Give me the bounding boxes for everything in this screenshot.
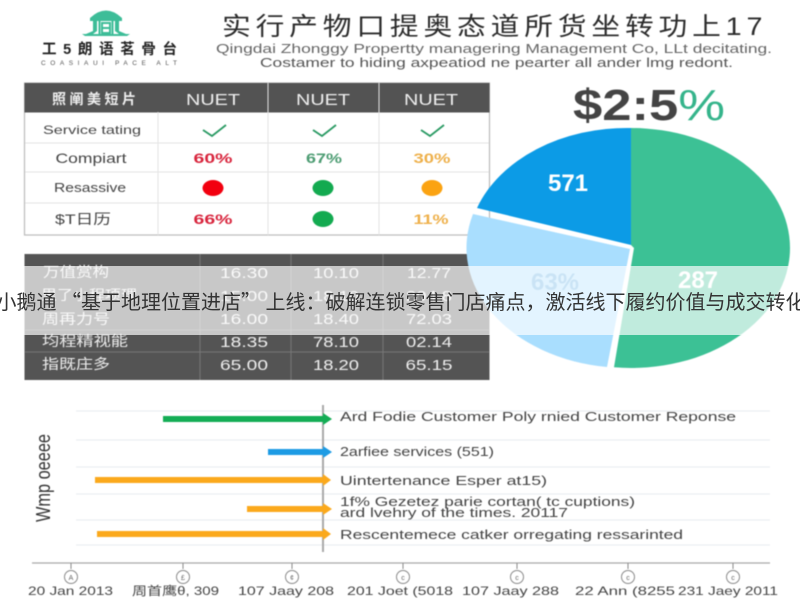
pie title: $2:5 % — [573, 81, 725, 130]
row: service rating — [43, 123, 444, 137]
bar labels: ard lvehry of the times. 20117 — [340, 505, 568, 520]
time axis: c — [731, 575, 735, 582]
row: service rating: Service tating — [43, 123, 141, 137]
table header: NUET — [404, 92, 458, 109]
arrow: amber 1 — [95, 474, 331, 486]
row: cost: $T日历 — [55, 211, 111, 227]
time axis: c — [401, 575, 405, 582]
table: figures: 12.77 — [407, 265, 451, 282]
time axis: 201 Joet (5018 — [347, 584, 453, 598]
table: figures: 里了小程项理 — [41, 287, 137, 303]
row: compliant: 60% — [194, 150, 233, 166]
bar labels: 2arfiee services (551) — [340, 444, 494, 459]
row: response: Resassive — [54, 180, 126, 195]
row: compliant: Compiart — [56, 150, 127, 166]
label: 571: 571 — [548, 170, 588, 197]
time axis: c — [515, 575, 519, 582]
table header: 照阐美短片 — [52, 91, 136, 107]
overlay banner headline: 小鹅通 “基于地理位置进店” 上线：破解连锁零售门店痛点，激活线下履约价值与成交转化 — [0, 286, 800, 315]
bar labels: Ard Fodie Customer Poly rnied Customer Reponse — [340, 409, 736, 424]
table: figures: 78.10 — [313, 334, 359, 351]
icon: building — [82, 10, 130, 36]
table header: NUET — [186, 92, 240, 109]
table: service comparison — [24, 83, 490, 235]
row: cost: 11% — [414, 211, 449, 227]
logo — [41, 10, 177, 67]
table: figures: 均程精视能 — [42, 333, 128, 349]
table header — [24, 83, 490, 112]
time axis: 231 Jaey 2011 — [678, 584, 778, 598]
row: cost: 66% — [194, 211, 233, 227]
table: figures: 18.10 — [313, 288, 359, 305]
timeline chart — [28, 405, 778, 598]
subtitle: Costamer to hiding axpeatiod ne pearter all ander lmg redont. — [260, 56, 733, 70]
row: response — [54, 180, 442, 196]
label: 287: 287 — [678, 267, 718, 294]
arrow: blue — [268, 446, 332, 458]
logo name: 工5朗语茗骨台 — [42, 40, 177, 58]
time axis — [28, 563, 778, 598]
row: compliant — [56, 150, 451, 166]
logo tagline: COASIAUI PACE ALT — [41, 60, 177, 67]
time axis: 22 Ann (8255 — [575, 584, 675, 598]
row: compliant: 67% — [306, 150, 343, 166]
time axis: 20 Jan 2013 — [28, 584, 113, 598]
subtitle: Qingdai Zhonggy Propertty managering Management Co, LLt decitating. — [216, 42, 772, 56]
row: compliant: 30% — [414, 150, 451, 166]
pie chart — [466, 128, 790, 368]
bar labels: Uintertenance Esper at15) — [340, 473, 547, 488]
table: figures: 16.30 — [220, 265, 268, 282]
overlay banner headline — [0, 266, 800, 335]
y axis label: Wmp oeeee — [33, 434, 55, 522]
slice: light blue — [466, 214, 630, 367]
table: figures: 72.03 — [406, 311, 452, 328]
table: figures: 204.8 — [406, 288, 452, 305]
time axis: 107 Jaay 208 — [238, 584, 334, 598]
bar labels: Rescentemece catker orregating ressarinted — [340, 527, 683, 542]
table: figures: 65.15 — [406, 357, 452, 374]
table header: NUET — [296, 92, 350, 109]
title: 实行产物口提奥态道所货坐转功上17 — [222, 13, 762, 41]
table: figures: 10.10 — [313, 265, 359, 282]
table: figures — [24, 254, 490, 380]
arrow: green — [163, 413, 332, 425]
arrow: amber 3 — [97, 528, 331, 540]
table: figures: 指既庄多 — [42, 356, 110, 372]
time axis: £ — [181, 575, 185, 582]
arrow: amber 2 — [247, 503, 332, 515]
table: figures: 16.00 — [220, 311, 268, 328]
time axis: c — [626, 575, 630, 582]
label: 63%: 63% — [531, 269, 579, 296]
slice: blue — [477, 128, 631, 245]
time axis: 周首鹰θ, 309 — [132, 583, 219, 598]
time axis: A — [69, 575, 74, 582]
time axis: ¢ — [290, 575, 294, 582]
table: figures: 15.00 — [220, 288, 268, 305]
bar labels — [340, 409, 736, 542]
subtitle — [216, 42, 772, 70]
table: figures: 18.40 — [313, 311, 359, 328]
slice: green — [614, 128, 790, 368]
bar labels: 1f% Gezetez parie cortan( tc cuptions) — [340, 494, 635, 509]
table: figures: 02.14 — [406, 334, 452, 351]
time axis: 107 Jaay 288 — [462, 584, 559, 598]
table: figures: 周再力号 — [42, 311, 110, 327]
table: figures: 65.00 — [220, 357, 268, 374]
row: cost — [55, 211, 449, 227]
table: figures: 18.35 — [220, 334, 268, 351]
table: figures: 18.20 — [313, 357, 359, 374]
table: figures: 万值赏构 — [43, 264, 109, 280]
